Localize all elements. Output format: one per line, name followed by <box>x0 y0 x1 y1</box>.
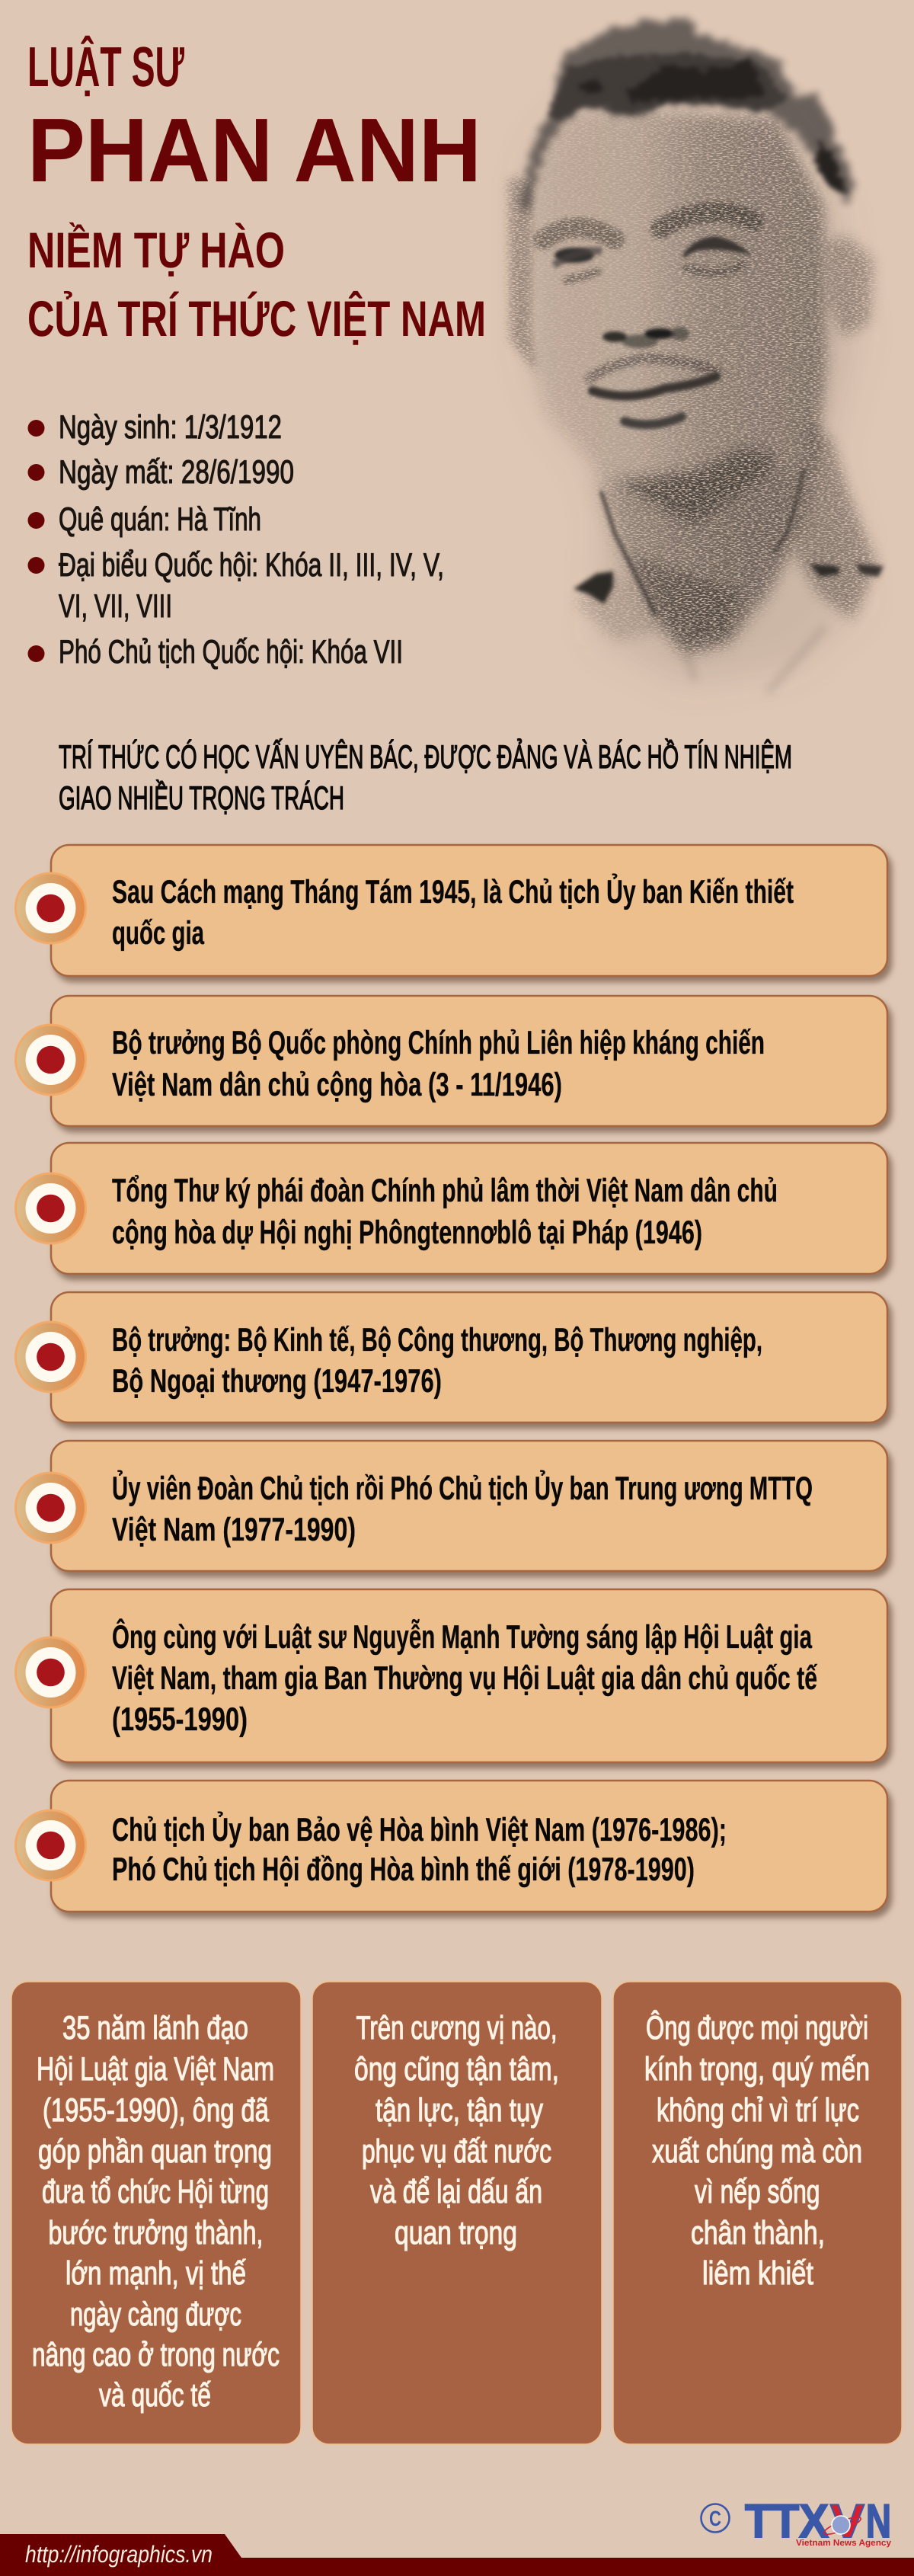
card 6 text <box>112 1618 817 1738</box>
panel 1 text: (1955-1990), ông đã <box>43 2092 269 2129</box>
card 5 text <box>112 1470 813 1548</box>
title <box>27 35 486 347</box>
right ear <box>826 236 874 338</box>
portrait: nose <box>602 327 689 348</box>
portrait: hair <box>520 17 855 219</box>
bullet <box>27 645 44 662</box>
bullet <box>27 420 44 437</box>
card 2 <box>15 996 887 1126</box>
section heading <box>59 738 792 817</box>
fact: birth date: Ngày sinh: 1/3/1912 <box>59 409 282 446</box>
card 6 <box>15 1589 887 1762</box>
card 1 text: quốc gia <box>112 915 205 952</box>
logo: TTXVN Vietnam News Agency <box>701 2495 892 2548</box>
portrait: soft halo and skin tone <box>526 99 861 686</box>
card 4 <box>15 1292 887 1422</box>
panel 2 text: Trên cương vị nào, <box>356 2010 558 2046</box>
panel 1 text: và quốc tế <box>99 2377 211 2414</box>
panel 2 text: tận lực, tận tụy <box>376 2092 543 2129</box>
icon: target marker <box>15 1173 85 1243</box>
section heading: GIAO NHIỀU TRỌNG TRÁCH <box>59 779 344 817</box>
icon: target marker <box>15 1810 85 1880</box>
bullet <box>27 464 44 481</box>
icon: target marker <box>15 873 85 943</box>
fact: vice chairman: Phó Chủ tịch Quốc hội: Khóa VII <box>59 634 403 670</box>
panel 3 text <box>644 2010 870 2292</box>
neck tone <box>599 472 805 652</box>
panel 1 text: Hội Luật gia Việt Nam <box>37 2051 274 2088</box>
wordmark TTXVN: TTX <box>745 2495 829 2548</box>
portrait: mouth <box>593 376 716 424</box>
card 4 text <box>112 1322 762 1400</box>
agency name: Vietnam News Agency <box>796 2539 892 2548</box>
lower neck shadow <box>630 554 741 650</box>
panel: dedication <box>312 1982 602 2444</box>
card 7 text: Phó Chủ tịch Hội đồng Hòa bình thế giới (1978-1990) <box>112 1851 695 1888</box>
panel 1 text: nâng cao ở trong nước <box>32 2337 280 2373</box>
sideburn halo <box>509 175 538 373</box>
panel 3 text: chân thành, <box>691 2215 825 2251</box>
biography facts list <box>27 409 444 670</box>
icon: target marker <box>15 1322 85 1392</box>
card 7 text <box>112 1811 727 1888</box>
fact: death date: Ngày mất: 28/6/1990 <box>59 454 294 491</box>
panel 1 text <box>32 2010 280 2414</box>
panel 1 text: bước trưởng thành, <box>49 2215 264 2251</box>
title line: NIỀM TỰ HÀO: NIỀM TỰ HÀO <box>27 222 285 278</box>
panel 1 text: đưa tổ chức Hội từng <box>42 2174 269 2210</box>
left collar <box>574 571 659 640</box>
fact: national assembly deputy: VI, VII, VIII <box>59 588 172 625</box>
fact: national assembly deputy: Đại biểu Quốc hội: Khóa II, III, IV, V, <box>59 547 444 584</box>
right shoulder <box>794 419 878 619</box>
card 3 <box>15 1143 887 1274</box>
panel 1 text: lớn mạnh, vị thế <box>66 2255 246 2292</box>
bullet <box>27 512 44 529</box>
panel 3 text: vì nếp sống <box>695 2174 820 2210</box>
panel 2 text: quan trọng <box>395 2215 517 2251</box>
portrait photo <box>509 17 884 693</box>
portrait: grainy shading <box>509 110 878 654</box>
bullet <box>27 557 44 574</box>
portrait: collar <box>574 564 884 693</box>
panel 2 text: phục vụ đất nước <box>362 2133 551 2170</box>
panel: 35 years leadership <box>11 1982 301 2444</box>
portrait: eyes <box>554 236 752 265</box>
card 2 text <box>112 1025 765 1103</box>
card 5 <box>15 1441 887 1571</box>
wordmark TTXVN: N <box>866 2495 891 2548</box>
panel 2 text: và để lại dấu ấn <box>370 2174 542 2210</box>
icon: target marker <box>15 1637 85 1707</box>
title line: PHAN ANH: PHAN ANH <box>27 100 481 201</box>
globe and orbit <box>823 2514 862 2537</box>
card 3 text <box>112 1173 778 1251</box>
card 7 <box>15 1781 887 1912</box>
copyright symbol <box>701 2504 730 2533</box>
icon: target marker <box>15 1473 85 1543</box>
face and neck tone <box>535 110 827 654</box>
card 6 text: (1955-1990) <box>112 1701 248 1738</box>
eyebrows and shading <box>544 212 754 379</box>
portrait: neck lines <box>602 470 804 613</box>
card 1 <box>15 845 887 976</box>
card 2 text: Việt Nam dân chủ cộng hòa (3 - 11/1946) <box>112 1067 562 1103</box>
card 1 text <box>112 873 794 952</box>
wordmark TTXVN <box>745 2495 891 2548</box>
website url: http://infographics.vn <box>25 2541 213 2568</box>
panel 1 text: góp phần quan trọng <box>38 2133 272 2170</box>
title line: CỦA TRÍ THỨC VIỆT NAM: CỦA TRÍ THỨC VIỆT NAM <box>27 290 486 347</box>
panel 1 text: 35 năm lãnh đạo <box>62 2010 248 2046</box>
title line: LUẬT SƯ: LUẬT SƯ <box>27 35 184 98</box>
panel: respected character <box>613 1982 902 2444</box>
fact: hometown: Quê quán: Hà Tĩnh <box>59 501 261 538</box>
icon: target marker <box>15 1025 85 1095</box>
footer bar <box>0 2534 914 2576</box>
jaw shadow <box>619 447 775 526</box>
copyright symbol: C <box>709 2507 721 2530</box>
fact: national assembly deputy <box>59 547 444 625</box>
panel 2 text: ông cũng tận tâm, <box>354 2051 559 2088</box>
card 4 text: Bộ Ngoại thương (1947-1976) <box>112 1363 442 1400</box>
wordmark TTXVN: V <box>830 2495 864 2548</box>
panel 1 text: ngày càng được <box>70 2296 241 2333</box>
panel 2 text <box>354 2010 559 2251</box>
panel 3 text: liêm khiết <box>702 2255 813 2292</box>
card 5 text: Việt Nam (1977-1990) <box>112 1512 356 1548</box>
